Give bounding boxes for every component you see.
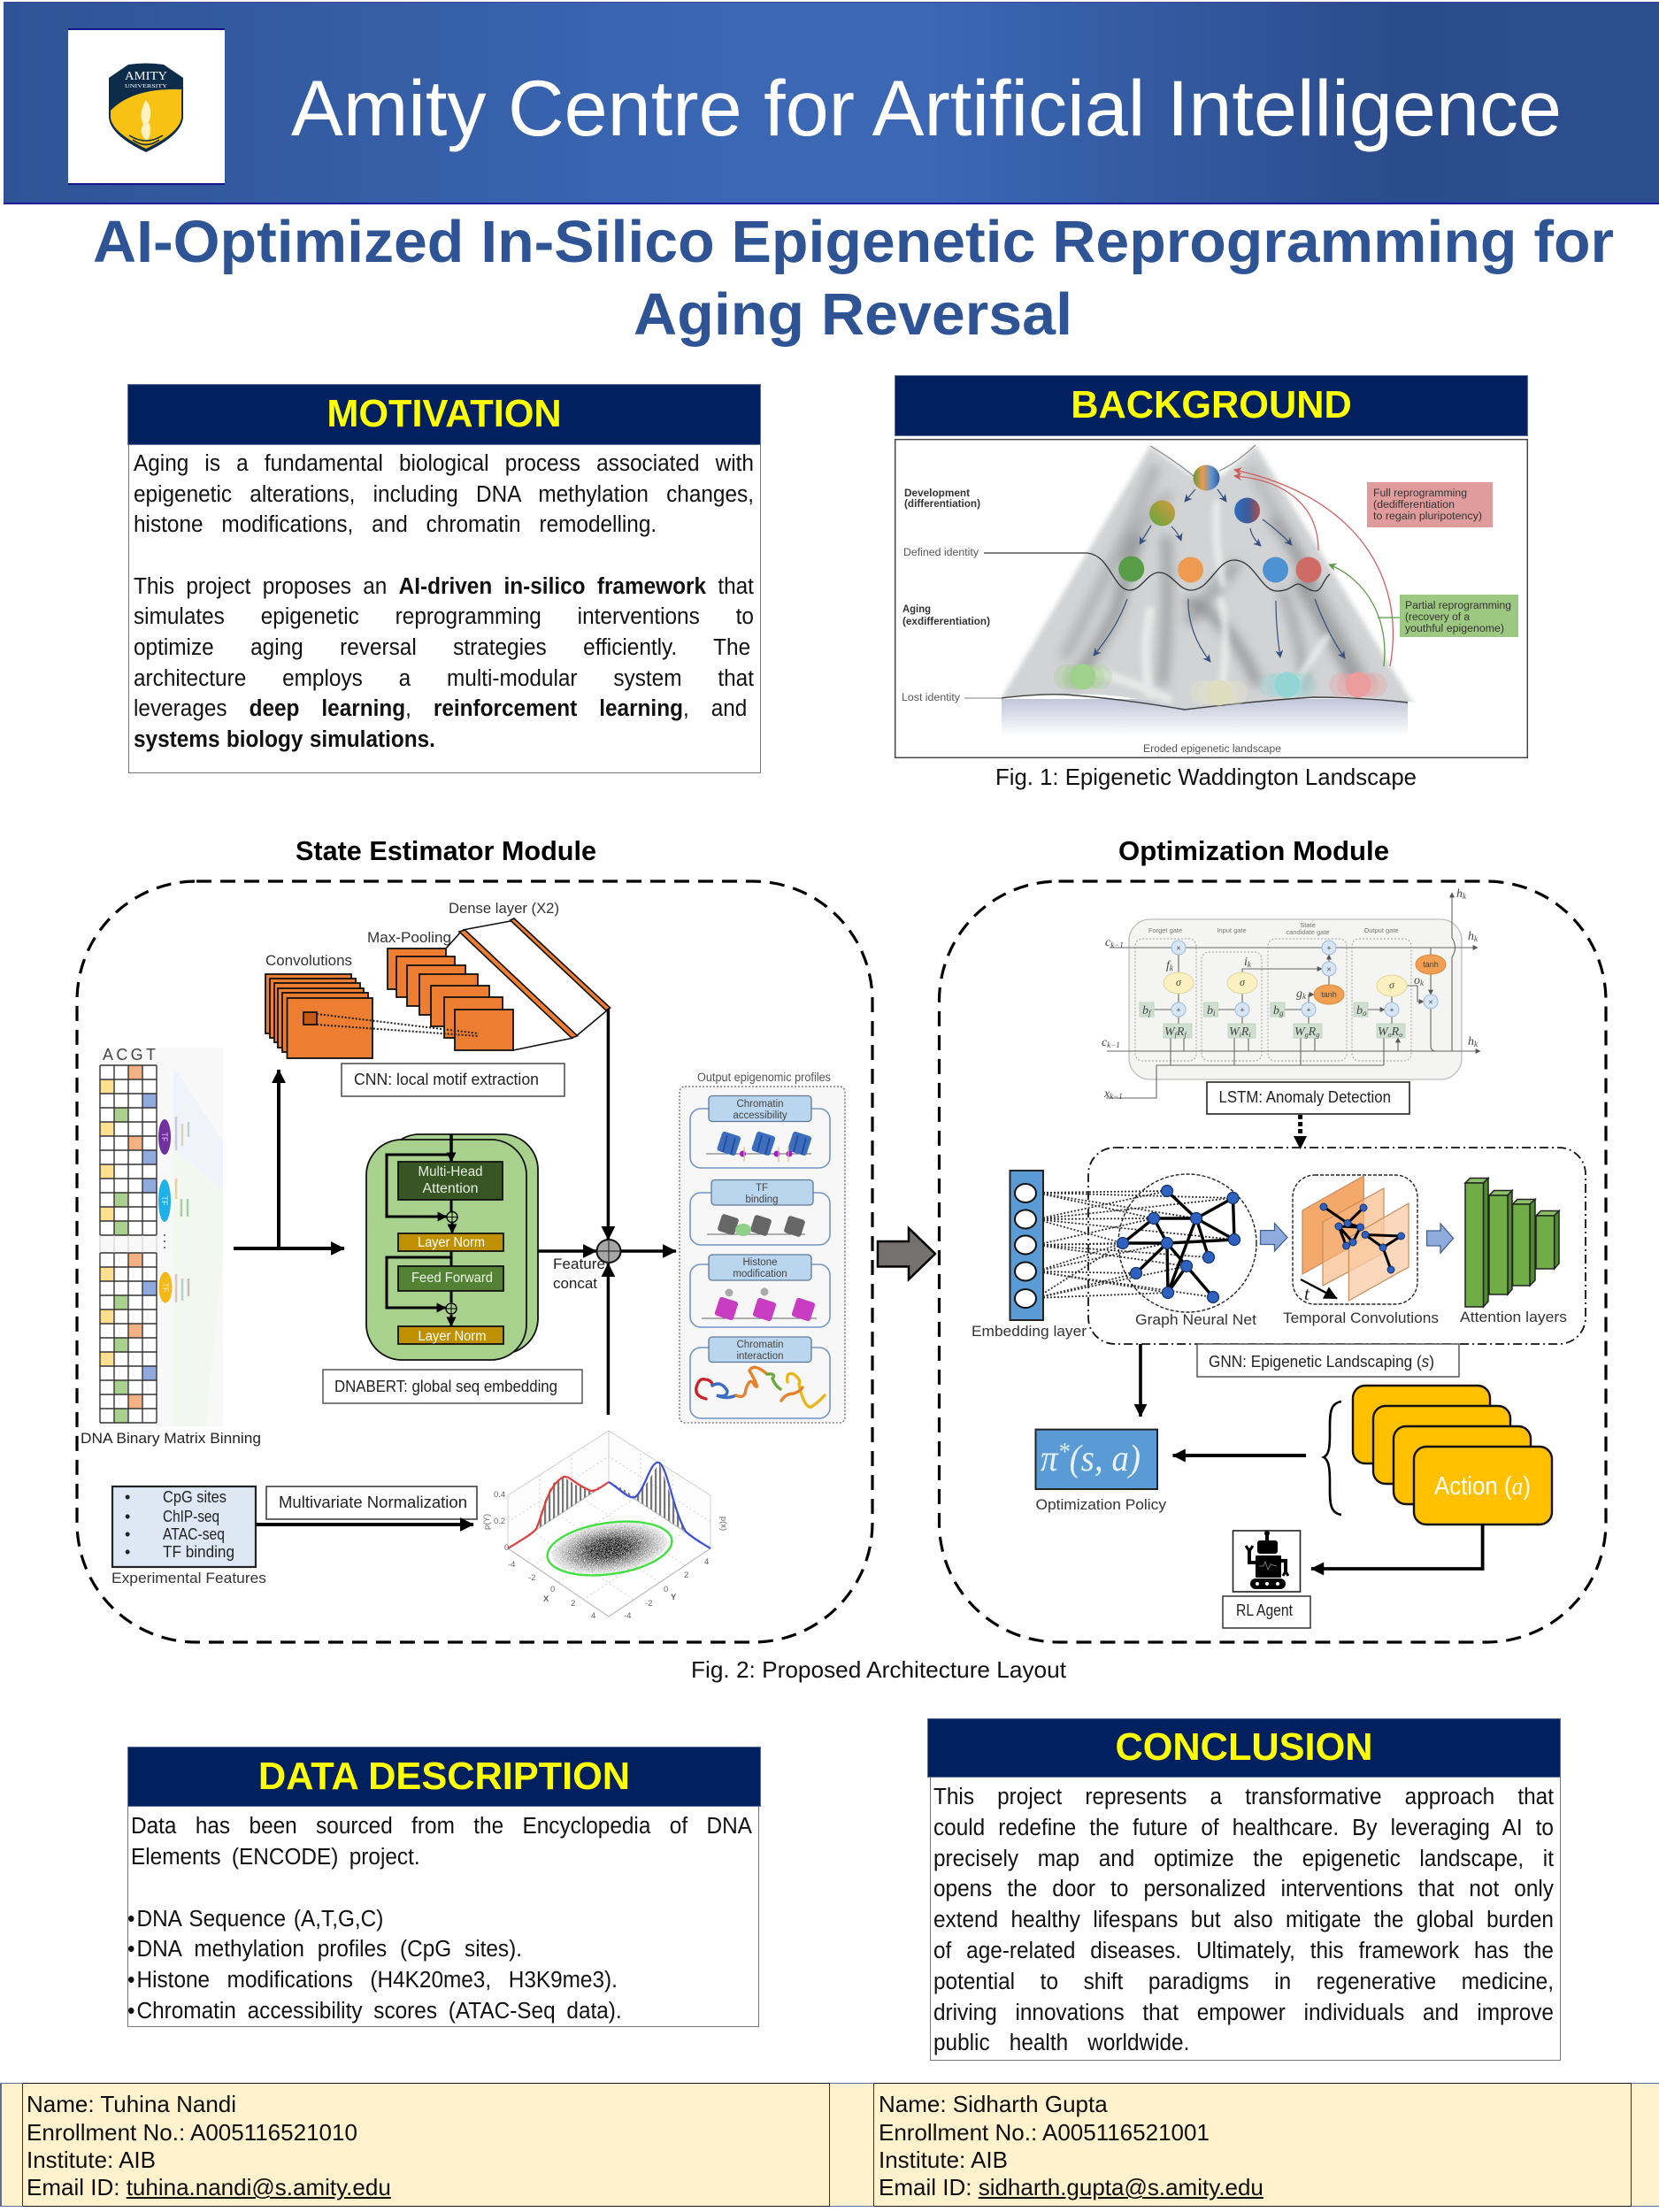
- LSTM cell diagram: c: [1105, 936, 1110, 949]
- label: optimization policy: Optimization Policy: [1035, 1496, 1166, 1513]
- panel: state estimator module: [75, 835, 874, 1644]
- graph neural net: [1117, 1174, 1256, 1312]
- banner title: Amity Centre for Artificial Intelligence: [291, 64, 1562, 152]
- multivariate distribution plot: 0.2: [494, 1517, 505, 1526]
- list: data types: •: [127, 1999, 135, 2024]
- label box: multivariate normalization: Multivariate Normalization: [279, 1494, 467, 1511]
- multivariate distribution plot: 2: [684, 1571, 688, 1580]
- list: data types: DNA methylation profiles (CpG sites).: [137, 1937, 522, 1962]
- LSTM cell diagram: o: [1388, 1031, 1392, 1039]
- list: data types: Chromatin accessibility scores (ATAC-Seq data).: [137, 1999, 622, 2024]
- experimental features box: CpG sites: [163, 1488, 227, 1506]
- caption: figure 1: Fig. 1: Epigenetic Waddington Landscape: [995, 764, 1417, 790]
- label: convolutions: Convolutions: [265, 952, 352, 969]
- label box: multivariate normalization: [266, 1486, 477, 1519]
- optimization policy box: [1035, 1430, 1157, 1489]
- heading: motivation: MOTIVATION: [326, 393, 562, 435]
- text: author two details: Email ID: sidharth.gupta@s.amity.edu: [879, 2174, 1263, 2200]
- embedding layer: [1010, 1171, 1043, 1320]
- callout: full reprogramming: to regain pluripotency): [1373, 511, 1482, 522]
- label box: RL agent: RL Agent: [1236, 1601, 1293, 1619]
- LSTM cell diagram: k: [1474, 1040, 1479, 1048]
- optimization policy box: π: [1041, 1439, 1059, 1479]
- LSTM cell diagram: o: [1414, 974, 1420, 987]
- LSTM cell diagram: R: [1176, 1025, 1185, 1039]
- layer norm: Layer Norm: [418, 1235, 485, 1250]
- label: graph neural net: Graph Neural Net: [1135, 1311, 1256, 1328]
- text: conclusion paragraph: This project represents a transformative approach that: [933, 1785, 1554, 1809]
- DNA binary matrix: TF: [160, 1196, 169, 1206]
- multivariate distribution plot: 0: [664, 1585, 668, 1594]
- LSTM cell diagram: σ: [1240, 976, 1246, 988]
- profile: TF binding: [690, 1180, 830, 1245]
- LSTM cell diagram: k: [1302, 992, 1307, 1001]
- label box: GNN epigenetic landscaping: [1197, 1344, 1459, 1377]
- text: conclusion paragraph: could redefine the future of healthcare. By leveraging AI to: [933, 1816, 1554, 1840]
- LSTM cell diagram: State: [1300, 921, 1316, 929]
- text: motivation paragraphs: simulates epigenetic reprogramming interventions to: [134, 604, 754, 629]
- LSTM cell diagram: k: [1420, 979, 1425, 987]
- multivariate distribution plot: 0: [504, 1543, 509, 1553]
- poster title: AI-Optimized In-Silico Epigenetic Reprogramming for: [93, 209, 1614, 275]
- LSTM cell diagram: σ: [1176, 976, 1182, 988]
- experimental features box: TF binding: [163, 1543, 234, 1561]
- profile: TF binding: TF: [756, 1183, 768, 1194]
- panel: background: [894, 375, 1529, 790]
- poster title: [93, 209, 1614, 348]
- LSTM cell diagram: R: [1308, 1025, 1317, 1039]
- panel: conclusion: [927, 1718, 1561, 2061]
- heading: data description: DATA DESCRIPTION: [258, 1755, 630, 1798]
- callout: full reprogramming: [1367, 482, 1493, 527]
- text: author two details: Name: Sidharth Gupta: [879, 2091, 1108, 2117]
- heading: background: BACKGROUND: [1071, 384, 1352, 426]
- panel: motivation: [127, 384, 761, 773]
- LSTM cell diagram: g: [1316, 1031, 1319, 1039]
- LSTM cell diagram: +: [1306, 1005, 1311, 1014]
- label box: LSTM anomaly detection: LSTM: Anomaly Detection: [1219, 1088, 1391, 1106]
- callout: partial reprogramming: (recovery of a: [1405, 612, 1471, 623]
- author cell: Sidharth Gupta: [874, 2083, 1632, 2207]
- LSTM cell diagram: candidate gate: [1286, 928, 1330, 936]
- profile: chromatin interaction: [690, 1337, 830, 1418]
- arrow: to distribution plot: [256, 1523, 473, 1526]
- text: motivation paragraphs: systems biology simulations.: [134, 727, 435, 752]
- text: author two details: Enrollment No.: A005116521001: [879, 2118, 1210, 2145]
- logo card: [68, 28, 225, 185]
- icon: Amity University shield: UNIVERSITY: [125, 83, 167, 89]
- text: conclusion paragraph: [933, 1785, 1554, 2055]
- text: conclusion paragraph: opens the door to personalized interventions that not only: [933, 1877, 1554, 1901]
- axis labels: (differentiation): [904, 499, 980, 510]
- LSTM cell diagram: +: [1176, 1005, 1181, 1014]
- multivariate distribution plot: -2: [528, 1573, 535, 1583]
- LSTM cell diagram: R: [1391, 1025, 1400, 1039]
- label: embedding layer: Embedding layer: [972, 1323, 1087, 1340]
- spacer cell: [1632, 2083, 1659, 2207]
- experimental features box: ATAC-seq: [163, 1525, 225, 1543]
- LSTM cell diagram: i: [1248, 1031, 1251, 1039]
- LSTM cell diagram: i: [1213, 1009, 1216, 1018]
- LSTM cell diagram: tanh: [1423, 960, 1439, 969]
- temporal convolutions: [1293, 1175, 1417, 1304]
- multivariate distribution plot: p(x): [718, 1517, 728, 1531]
- LSTM cell diagram: k−1: [1110, 1092, 1123, 1101]
- multi-head attention: [398, 1162, 503, 1200]
- LSTM cell diagram: g: [1279, 1009, 1284, 1018]
- text box: data description body: [127, 1800, 759, 2027]
- arrows: differentiation paths: [1094, 489, 1345, 662]
- arrow: state estimator to optimization: [876, 1225, 937, 1282]
- multivariate distribution plot: 2: [571, 1599, 575, 1609]
- arrow: GNN to policy: [1139, 1344, 1142, 1417]
- layer norm: Layer Norm: [418, 1329, 487, 1344]
- axis labels: Defined identity: [903, 548, 979, 558]
- callout: partial reprogramming: youthful epigenome): [1405, 624, 1504, 634]
- multivariate distribution plot: X: [543, 1594, 549, 1604]
- text: author one details: Email ID: tuhina.nandi@s.amity.edu: [27, 2174, 391, 2200]
- LSTM cell diagram: h: [1468, 1035, 1474, 1048]
- LSTM cell diagram: R: [1240, 1025, 1249, 1039]
- multivariate distribution plot: -4: [624, 1611, 631, 1621]
- block arrow: [1260, 1223, 1287, 1251]
- LSTM cell diagram: Output gate: [1363, 926, 1399, 934]
- text: conclusion paragraph: of age-related diseases. Ultimately, this framework has the: [933, 1939, 1554, 1963]
- text: motivation paragraphs: leverages deep learning, reinforcement learning, and: [134, 696, 747, 721]
- text: data description intro: Data has been sourced from the Encyclopedia of DNA: [131, 1814, 752, 1839]
- LSTM cell diagram: g: [1296, 987, 1302, 1001]
- experimental features box: •: [125, 1488, 130, 1506]
- feature concat junction: [538, 1009, 676, 1415]
- experimental features box: •: [125, 1508, 130, 1525]
- optimization policy box: *: [1058, 1439, 1070, 1466]
- LSTM cell diagram: f: [1175, 1031, 1179, 1039]
- cell balls: [1118, 465, 1322, 582]
- DNABERT transformer block: [366, 1134, 538, 1360]
- multivariate distribution plot: -2: [645, 1599, 652, 1609]
- LSTM cell diagram: i: [1240, 1031, 1241, 1039]
- LSTM cell diagram: c: [1102, 1036, 1107, 1049]
- heading: optimization module: Optimization Module: [1118, 835, 1389, 866]
- profile: histone modification: modification: [733, 1269, 787, 1279]
- label box: CNN local motif extraction: [342, 1064, 565, 1096]
- text: author two details: Institute: AIB: [879, 2147, 1008, 2173]
- axis labels: Lost identity: [902, 693, 960, 703]
- text: conclusion paragraph: public health worldwide.: [933, 2031, 1189, 2055]
- label: feature concat: [553, 1256, 605, 1292]
- callout: partial reprogramming: Partial reprogramming: [1405, 601, 1511, 611]
- LSTM cell diagram: k: [1248, 960, 1252, 969]
- feed forward: [398, 1266, 503, 1291]
- LSTM cell diagram: W: [1378, 1025, 1388, 1039]
- LSTM cell diagram: k: [1463, 892, 1467, 901]
- label box: LSTM anomaly detection: [1207, 1082, 1409, 1114]
- axis labels: (exdifferentiation): [902, 617, 990, 627]
- arrow: actions to policy: [1173, 1454, 1306, 1457]
- LSTM cell diagram: W: [1229, 1025, 1240, 1039]
- curly brace: [1324, 1402, 1341, 1515]
- feed forward: Feed Forward: [411, 1271, 493, 1286]
- LSTM cell diagram: k: [1170, 964, 1174, 972]
- text: conclusion paragraph: precisely map and optimize the epigenetic landscape, it: [933, 1847, 1554, 1871]
- axis labels: [902, 488, 1281, 755]
- DNA binary matrix: ACGT: [103, 1046, 156, 1064]
- dashed module border: [77, 881, 872, 1642]
- attention layers: [1465, 1179, 1559, 1307]
- text: motivation paragraphs: epigenetic alterations, including DNA methylation changes,: [134, 481, 754, 506]
- LSTM cell diagram: tanh: [1321, 990, 1337, 999]
- panel: data description: [127, 1747, 761, 2027]
- multi-head attention: Multi-Head: [418, 1164, 483, 1179]
- LSTM cell diagram: +: [1326, 943, 1332, 952]
- LSTM cell diagram: k: [1474, 934, 1479, 943]
- LSTM cell diagram: f: [1148, 1009, 1152, 1018]
- receptive field dotted lines: [317, 1014, 479, 1036]
- LSTM cell diagram: ×: [1326, 964, 1332, 973]
- LSTM cell diagram: o: [1399, 1031, 1402, 1039]
- experimental features box: ChIP-seq: [163, 1508, 219, 1525]
- caption: figure 2: Fig. 2: Proposed Architecture Layout: [691, 1656, 1067, 1683]
- LSTM cell diagram: W: [1164, 1025, 1175, 1039]
- text box: motivation body: [128, 437, 761, 773]
- LSTM cell diagram: [1102, 887, 1480, 1101]
- callout: full reprogramming: Full reprogramming: [1373, 488, 1467, 499]
- LSTM cell diagram: Input gate: [1217, 926, 1247, 934]
- label box: DNABERT global seq embedding: DNABERT: global seq embedding: [334, 1378, 557, 1395]
- multivariate distribution plot: [482, 1431, 728, 1621]
- axis labels: Eroded epigenetic landscape: [1143, 744, 1281, 755]
- list: data types: DNA Sequence (A,T,G,C): [137, 1907, 383, 1932]
- spacer cell: [830, 2083, 874, 2207]
- action stack: [1353, 1386, 1552, 1525]
- label: temporal convolutions: Temporal Convolutions: [1283, 1310, 1439, 1326]
- text: motivation paragraphs: optimize aging reversal strategies efficiently. The: [134, 635, 750, 660]
- heading: data description: [127, 1747, 761, 1807]
- multivariate distribution plot: p(Y): [482, 1514, 492, 1530]
- experimental features box: •: [125, 1525, 130, 1543]
- dotted connections: embedding to graph: [1036, 1191, 1234, 1298]
- defined identity wave: [984, 553, 1330, 591]
- profile: chromatin interaction: Chromatin: [736, 1340, 784, 1350]
- LSTM cell diagram: h: [1468, 930, 1474, 943]
- CNN convolution stack: [265, 974, 373, 1058]
- text: data description intro: Elements (ENCODE) project.: [131, 1845, 420, 1870]
- output epigenomic profiles: [680, 1071, 845, 1423]
- arrows: full reprogramming: [1234, 470, 1393, 666]
- label: dense layer: Dense layer (X2): [449, 900, 559, 917]
- arrows: input flow: [234, 1070, 344, 1248]
- multivariate distribution plot: 0.4: [494, 1490, 505, 1500]
- list: data types: Histone modifications (H4K20me3, H3K9me3).: [137, 1968, 618, 1993]
- LSTM cell diagram: b: [1207, 1004, 1213, 1018]
- heading: motivation: [127, 384, 761, 445]
- text box: conclusion body: [930, 1771, 1561, 2061]
- LSTM cell diagram: f: [1184, 1031, 1187, 1039]
- label box: GNN epigenetic landscaping: GNN: Epigenetic Landscaping (s): [1209, 1353, 1434, 1371]
- LSTM cell diagram: b: [1142, 1004, 1148, 1018]
- multivariate distribution plot: 0: [550, 1585, 555, 1594]
- LSTM cell diagram: h: [1456, 887, 1463, 901]
- layer norm: [398, 1326, 503, 1344]
- LSTM cell diagram: σ: [1389, 979, 1395, 991]
- dash-dot GNN group border: [1088, 1148, 1586, 1344]
- LSTM cell diagram: Forget gate: [1148, 926, 1182, 934]
- layer norm: [398, 1233, 503, 1251]
- text: conclusion paragraph: extend healthy lifespans but also mitigate the global burden: [933, 1908, 1554, 1932]
- faded cells: [1054, 664, 1387, 706]
- callout: partial reprogramming: [1400, 595, 1518, 637]
- DNA binary matrix: [99, 1046, 223, 1426]
- text: motivation paragraphs: Aging is a fundamental biological process associated with: [134, 451, 754, 476]
- block arrow: [1427, 1224, 1454, 1253]
- multivariate distribution plot: 4: [704, 1557, 709, 1567]
- icon: Amity University shield: [109, 64, 183, 152]
- text: motivation paragraphs: This project proposes an AI-driven in-silico framework that: [134, 574, 754, 599]
- label box: CNN local motif extraction: CNN: local motif extraction: [354, 1071, 539, 1088]
- poster title: Aging Reversal: [634, 281, 1072, 348]
- list: data types: •: [127, 1907, 135, 1932]
- arrow: LSTM to GNN (dashed): [1294, 1115, 1307, 1149]
- footer table: authors: [0, 2083, 1659, 2207]
- landscape mountain: [995, 445, 1416, 736]
- LSTM cell diagram: k−1: [1107, 1041, 1120, 1049]
- axis labels: Aging: [902, 604, 931, 615]
- label: attention layers: Attention layers: [1460, 1309, 1567, 1325]
- text: motivation paragraphs: [134, 451, 754, 752]
- icon: robot: [1233, 1531, 1301, 1592]
- label: max-pooling: Max-Pooling: [367, 929, 451, 946]
- label box: RL agent: [1223, 1596, 1310, 1628]
- LSTM cell diagram: f: [1166, 959, 1170, 972]
- text: author one details: Institute: AIB: [27, 2147, 156, 2173]
- LSTM cell diagram: ×: [1428, 998, 1433, 1007]
- profile: TF binding: binding: [745, 1194, 779, 1205]
- heading: background: [895, 375, 1528, 436]
- text: conclusion paragraph: driving innovations that empower individuals and improve: [933, 2001, 1554, 2025]
- LSTM cell diagram: o: [1363, 1009, 1367, 1018]
- dense layers: [446, 918, 611, 1050]
- header banner: [4, 2, 1659, 204]
- LSTM cell diagram: k−1: [1110, 941, 1124, 949]
- max-pooling stack: [388, 949, 513, 1050]
- list: data types: •: [127, 1968, 135, 1993]
- LSTM cell diagram: b: [1356, 1004, 1363, 1018]
- heading: state estimator module: State Estimator Module: [296, 835, 596, 866]
- DNA binary matrix: TF: [160, 1133, 169, 1142]
- output epigenomic profiles: Output epigenomic profiles: [697, 1071, 831, 1084]
- LSTM cell diagram: +: [1240, 1005, 1245, 1014]
- LSTM cell diagram: g: [1305, 1031, 1309, 1039]
- LSTM cell diagram: i: [1244, 956, 1248, 969]
- multivariate distribution plot: Y: [671, 1593, 677, 1602]
- heading: conclusion: CONCLUSION: [1115, 1726, 1373, 1769]
- spacer cell: [0, 2083, 23, 2207]
- optimization policy box: (s, a): [1070, 1439, 1141, 1479]
- LSTM cell diagram: +: [1389, 1005, 1394, 1014]
- label: feature concat: Feature: [553, 1256, 605, 1272]
- experimental features box: [112, 1486, 256, 1567]
- action stack: Action (a): [1434, 1472, 1531, 1501]
- temporal convolutions: t: [1304, 1283, 1310, 1304]
- LSTM cell diagram: b: [1273, 1004, 1279, 1018]
- profile: histone modification: [690, 1255, 830, 1327]
- profile: chromatin accessibility: [690, 1095, 830, 1168]
- text: conclusion paragraph: potential to shift paradigms in regenerative medicine,: [933, 1970, 1554, 1994]
- experimental features box: •: [125, 1543, 130, 1561]
- heading: conclusion: [927, 1718, 1561, 1778]
- text: author two details: [879, 2091, 1263, 2200]
- text: author one details: Enrollment No.: A005116521010: [27, 2118, 357, 2145]
- label: experimental features: Experimental Features: [111, 1570, 266, 1586]
- label box: DNABERT global seq embedding: [323, 1370, 582, 1403]
- text: motivation paragraphs: histone modifications, and chromatin remodelling.: [134, 512, 657, 537]
- LSTM cell diagram: ×: [1176, 943, 1181, 952]
- axis labels: Development: [904, 488, 970, 499]
- arrow: action to RL agent: [1311, 1525, 1483, 1569]
- figure: epigenetic Waddington landscape: [894, 439, 1529, 759]
- icon: Amity University shield: AMITY: [125, 70, 167, 83]
- text: author one details: Name: Tuhina Nandi: [27, 2091, 236, 2117]
- text: author one details: [27, 2091, 391, 2200]
- text: data description intro: [131, 1814, 752, 1870]
- label: feature concat: concat: [553, 1275, 597, 1292]
- text: motivation paragraphs: architecture employs a multi-modular system that: [134, 666, 754, 691]
- DNA binary matrix: TF: [161, 1283, 170, 1293]
- panel: optimization module: [938, 835, 1608, 1644]
- list: data types: [127, 1907, 622, 2024]
- profile: chromatin accessibility: Chromatin: [736, 1099, 784, 1110]
- profile: chromatin accessibility: accessibility: [733, 1110, 787, 1121]
- list: data types: •: [127, 1937, 135, 1962]
- multi-head attention: Attention: [423, 1181, 478, 1196]
- profile: chromatin interaction: interaction: [736, 1351, 784, 1362]
- line: lost identity leader: [964, 697, 1002, 699]
- profile: histone modification: Histone: [743, 1257, 777, 1268]
- arrow: partial reprogramming: [1329, 565, 1400, 666]
- dashed module border: [940, 881, 1606, 1642]
- label: DNA binary matrix binning: DNA Binary Matrix Binning: [81, 1430, 261, 1447]
- LSTM cell diagram: W: [1294, 1025, 1305, 1039]
- multivariate distribution plot: -4: [508, 1560, 515, 1570]
- author cell: Tuhina Nandi: [23, 2083, 830, 2207]
- callout: full reprogramming: (dedifferentiation: [1373, 500, 1455, 511]
- multivariate distribution plot: 4: [591, 1611, 595, 1621]
- LSTM cell diagram: x: [1104, 1087, 1110, 1101]
